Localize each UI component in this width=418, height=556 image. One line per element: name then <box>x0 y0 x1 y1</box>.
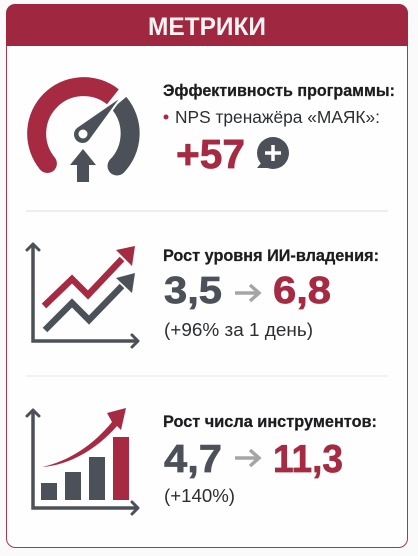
text block: AI proficiency growth: 3,5 <box>164 270 222 312</box>
icon: bar chart with rising arrow <box>27 408 138 514</box>
text block: AI proficiency growth <box>163 247 379 340</box>
header band <box>6 4 408 46</box>
text block: AI proficiency growth: (+96% за 1 день) <box>164 320 313 340</box>
text block: program effectiveness: +57 <box>176 131 245 177</box>
text block: tools growth: 11,3 <box>273 438 343 481</box>
text block: AI proficiency growth: Рост уровня ИИ-владения: <box>163 247 379 265</box>
text block: tools growth <box>163 413 377 506</box>
text block: tools growth: 4,7 <box>164 438 222 481</box>
icon: speech bubble with plus <box>257 137 289 169</box>
text block: tools growth: Рост числа инструментов: <box>163 413 377 431</box>
title: МЕТРИКИ <box>148 13 266 41</box>
text block: program effectiveness: NPS тренажёра «МАЯК»: <box>175 107 380 127</box>
text block: AI proficiency growth: 6,8 <box>273 270 331 312</box>
text block: tools growth: (+140%) <box>164 486 235 506</box>
icon: line chart with two rising arrows <box>27 244 138 347</box>
text block: program effectiveness <box>163 82 395 177</box>
text block: program effectiveness: Эффективность программы: <box>163 82 395 100</box>
icon: gauge with needle and up arrow <box>37 87 130 182</box>
